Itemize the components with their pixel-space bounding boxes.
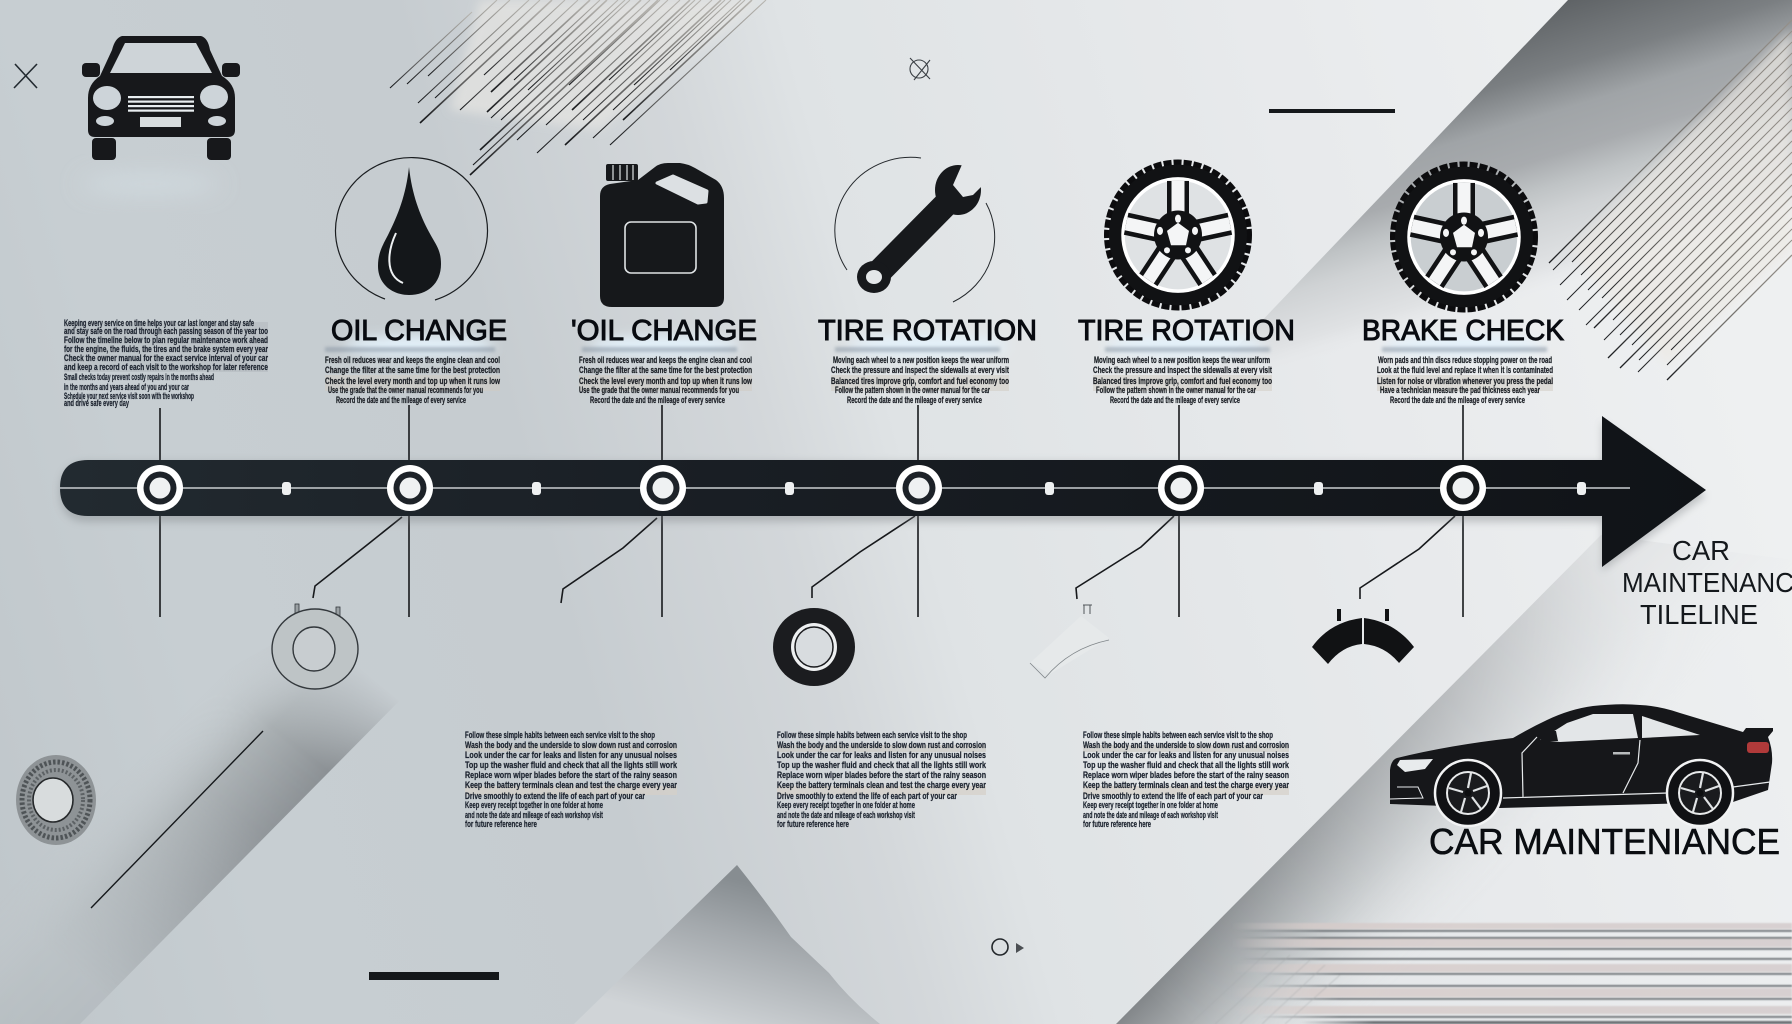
heading: tire rotation: TIRE ROTATION	[818, 315, 1037, 347]
diagonal connector lines	[313, 516, 1455, 603]
lower text block 1: Wash the body and the underside to slow down rust and corrosion	[465, 740, 677, 751]
text block: step 2: Use the grade that the owner manual recommends for you	[579, 385, 739, 396]
text block: step 1	[325, 347, 500, 406]
text block: step 3	[831, 347, 1010, 406]
icon: small crossed circle top	[910, 58, 930, 80]
timeline node 5	[1158, 465, 1204, 511]
icon: brake pad	[1312, 609, 1414, 664]
icon: small x mark	[14, 64, 37, 88]
text block: step 4: Record the date and the mileage of every service	[1110, 395, 1240, 406]
text block: step 1: Use the grade that the owner manual recommends for you	[328, 385, 483, 396]
decorative hatching: right	[1549, 20, 1792, 380]
timeline node 1	[137, 465, 183, 511]
lower text block 1: Top up the washer fluid and check that all the lights still work	[465, 760, 678, 771]
left text block: in the months and years ahead of you and your car	[64, 382, 189, 393]
lower text block 2: Wash the body and the underside to slow down rust and corrosion	[777, 740, 986, 751]
lower text block 2: and note the date and mileage of each workshop visit	[777, 810, 915, 821]
lower text block 3	[1083, 730, 1290, 830]
lower text block 2: Drive smoothly to extend the life of each part of your car	[777, 791, 957, 802]
lower text block 1: Drive smoothly to extend the life of each part of your car	[465, 791, 645, 802]
step 1: icon oil drop in circle	[335, 158, 487, 300]
side label: car maintenance timeline: TILELINE	[1640, 599, 1758, 630]
lower text block 2: Follow these simple habits between each service visit to the shop	[777, 730, 967, 741]
icon: coil ring	[16, 755, 96, 845]
decorative stripes: bottom right	[1190, 923, 1792, 1024]
text block: step 4: Balanced tires improve grip, comfort and fuel economy too	[1093, 376, 1272, 387]
left text block	[64, 318, 268, 409]
title: car maintenance: CAR MAINTENIANCE	[1429, 821, 1780, 862]
lower text block 3: and note the date and mileage of each workshop visit	[1083, 810, 1218, 821]
lower text block 3: Wash the body and the underside to slow down rust and corrosion	[1083, 740, 1289, 751]
heading: oil change: OIL CHANGE	[331, 315, 507, 347]
step 3: icon wrench	[835, 157, 995, 302]
timeline node 3	[640, 465, 686, 511]
lower text block 3: Keep every receipt together in one folder at home	[1083, 800, 1218, 811]
lower text block 1: Replace worn wiper blades before the start of the rainy season	[465, 770, 677, 781]
lower text block 3: Top up the washer fluid and check that all the lights still work	[1083, 760, 1290, 771]
lower text block 1: Look under the car for leaks and listen for any unusual noises	[465, 750, 677, 761]
text block: step 2: Check the level every month and top up when it runs low	[579, 376, 752, 387]
text block: step 2	[579, 347, 752, 406]
text block: step 3: Record the date and the mileage of every service	[847, 395, 982, 406]
side label: car maintenance timeline: CAR	[1672, 535, 1730, 566]
timeline tick dots	[282, 482, 1586, 495]
text block: step 2: Fresh oil reduces wear and keeps the engine clean and cool	[579, 355, 752, 366]
timeline node 6	[1440, 465, 1486, 511]
text block: step 5: Have a technician measure the pad thickness each year	[1380, 385, 1540, 396]
vertical connector lines	[160, 405, 1463, 617]
text block: step 3: Follow the pattern shown in the owner manual for the car	[835, 385, 990, 396]
decorative hatching: top	[390, 0, 766, 175]
icon: small circle and triangle	[992, 939, 1024, 955]
decorative bar: bottom	[369, 972, 499, 980]
timeline arrow	[60, 416, 1706, 571]
lower text block 1: Keep the battery terminals clean and test the charge every year	[465, 780, 677, 791]
lower text block 3: Keep the battery terminals clean and test the charge every year	[1083, 780, 1289, 791]
step 4: icon wheel	[1107, 163, 1249, 307]
text block: step 1: Fresh oil reduces wear and keeps the engine clean and cool	[325, 355, 500, 366]
lower text block 3: Look under the car for leaks and listen for any unusual noises	[1083, 750, 1289, 761]
text block: step 2: Change the filter at the same time for the best protection	[579, 365, 752, 376]
text block: step 5	[1377, 347, 1553, 406]
lower text block 2	[777, 730, 987, 830]
lower text block 3: Follow these simple habits between each service visit to the shop	[1083, 730, 1273, 741]
icon: car front	[82, 36, 240, 160]
side label: car maintenance timeline	[1622, 535, 1792, 630]
icon: side view car	[1390, 704, 1773, 826]
icon: faint tire sketch	[1030, 605, 1109, 678]
text block: step 1: Record the date and the mileage of every service	[336, 395, 466, 406]
text block: step 4: Moving each wheel to a new position keeps the wear uniform	[1094, 355, 1270, 366]
icon: ring	[773, 608, 855, 686]
text block: step 4	[1093, 347, 1273, 406]
text block: step 3: Moving each wheel to a new position keeps the wear uniform	[833, 355, 1009, 366]
left text block: Follow the timeline below to plan regular maintenance work ahead	[64, 335, 268, 346]
decorative diagonal line	[91, 731, 263, 908]
step 5: icon wheel	[1393, 165, 1535, 309]
text block: step 2: Record the date and the mileage of every service	[590, 395, 725, 406]
lower text block 3: Replace worn wiper blades before the start of the rainy season	[1083, 770, 1289, 781]
lower text block 2: Look under the car for leaks and listen for any unusual noises	[777, 750, 986, 761]
lower text block 1: for future reference here	[465, 819, 537, 830]
left text block: Schedule your next service visit soon with the workshop	[64, 391, 194, 402]
lower text block 2: Replace worn wiper blades before the start of the rainy season	[777, 770, 986, 781]
text block: step 3: Balanced tires improve grip, comfort and fuel economy too	[831, 376, 1009, 387]
decorative bar: top right	[1269, 109, 1395, 113]
text block: step 3: Check the pressure and inspect the sidewalls at every visit	[831, 365, 1010, 376]
lower text block 1: Follow these simple habits between each service visit to the shop	[465, 730, 655, 741]
heading: tire rotation 2: TIRE ROTATION	[1078, 315, 1295, 347]
lower text block 3: Drive smoothly to extend the life of each part of your car	[1083, 791, 1263, 802]
timeline node 2	[387, 465, 433, 511]
text block: step 4: Follow the pattern shown in the owner manual for the car	[1096, 385, 1256, 396]
lower text block 2: Keep the battery terminals clean and test the charge every year	[777, 780, 986, 791]
lower text block 1: and note the date and mileage of each workshop visit	[465, 810, 603, 821]
lower text block 2: Top up the washer fluid and check that all the lights still work	[777, 760, 987, 771]
left text block: and stay safe on the road through each passing season of the year too	[64, 326, 268, 337]
lower text block 1: Keep every receipt together in one folder at home	[465, 800, 603, 811]
lower text block 2: Keep every receipt together in one folder at home	[777, 800, 915, 811]
left text block: and keep a record of each visit to the workshop for later reference	[64, 362, 268, 373]
timeline node 4	[896, 465, 942, 511]
lower text block 3: for future reference here	[1083, 819, 1151, 830]
text block: step 5: Worn pads and thin discs reduce stopping power on the road	[1378, 355, 1552, 366]
heading: brake check: BRAKE CHECK	[1362, 315, 1565, 347]
heading: oil change 2: 'OIL CHANGE	[571, 315, 757, 347]
left text block: Check the owner manual for the exact service interval of your car	[64, 353, 268, 364]
lower text block 1	[465, 730, 678, 830]
left text block: for the engine, the fluids, the tires and the brake system every year	[64, 344, 268, 355]
text block: step 4: Check the pressure and inspect the sidewalls at every visit	[1093, 365, 1273, 376]
text block: step 5: Record the date and the mileage of every service	[1390, 395, 1525, 406]
icon: washer	[272, 604, 358, 689]
text block: step 1: Check the level every month and top up when it runs low	[325, 376, 500, 387]
left text block: Small checks today prevent costly repairs in the months ahead	[64, 372, 214, 383]
lower text block 2: for future reference here	[777, 819, 849, 830]
text block: step 5: Look at the fluid level and replace it when it is contaminated	[1377, 365, 1553, 376]
left text block: and drive safe every day	[64, 398, 129, 409]
left text block: Keeping every service on time helps your car last longer and stay safe	[64, 318, 254, 329]
heading glows	[344, 336, 1543, 356]
step 2: icon oil jug	[600, 163, 724, 307]
text block: step 1: Change the filter at the same time for the best protection	[325, 365, 500, 376]
text block: step 5: Listen for noise or vibration whenever you press the pedal	[1377, 376, 1553, 387]
